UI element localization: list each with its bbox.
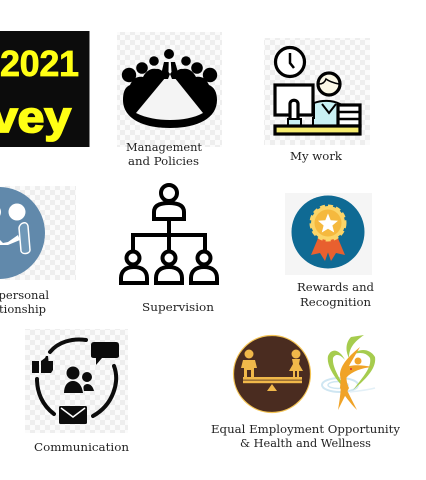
label: management and policies: Management	[126, 140, 202, 154]
label: supervision: Supervision	[142, 300, 215, 314]
label: equal employment opportunity and health and wellness	[211, 422, 401, 450]
title banner: 2021 survey	[0, 31, 90, 147]
panel: interpersonal relationship	[0, 186, 76, 316]
icon: handshake circle	[0, 187, 45, 279]
label: management and policies	[126, 140, 202, 168]
label: rewards and recognition: Rewards and	[297, 280, 375, 294]
label: management and policies: and Policies	[128, 154, 199, 168]
label: equal employment opportunity and health and wellness: & Health and Wellness	[240, 436, 371, 450]
label: rewards and recognition	[297, 280, 375, 309]
icon: health and wellness figure	[322, 335, 375, 410]
panel: equal employment opportunity and health and wellness	[211, 335, 401, 450]
title banner: 2021 survey: 2021	[0, 43, 79, 84]
icon: medal	[292, 196, 364, 268]
label: communication: Communication	[34, 440, 130, 454]
label: rewards and recognition: Recognition	[300, 295, 372, 309]
icon: communication ring	[32, 340, 119, 424]
panel: management and policies	[117, 32, 222, 168]
icon: equality seesaw	[234, 336, 310, 412]
panel: supervision	[121, 185, 217, 314]
panel: rewards and recognition	[285, 193, 375, 309]
label: interpersonal relationship	[0, 288, 49, 316]
icon: person at desk	[275, 48, 360, 134]
panel: my work	[264, 38, 370, 163]
icon: org chart	[121, 185, 217, 283]
panel: communication	[25, 329, 130, 454]
label: equal employment opportunity and health and wellness: Equal Employment Opportunity	[211, 422, 401, 436]
label: my work: My work	[290, 149, 343, 163]
icon: boardroom table	[122, 49, 217, 128]
